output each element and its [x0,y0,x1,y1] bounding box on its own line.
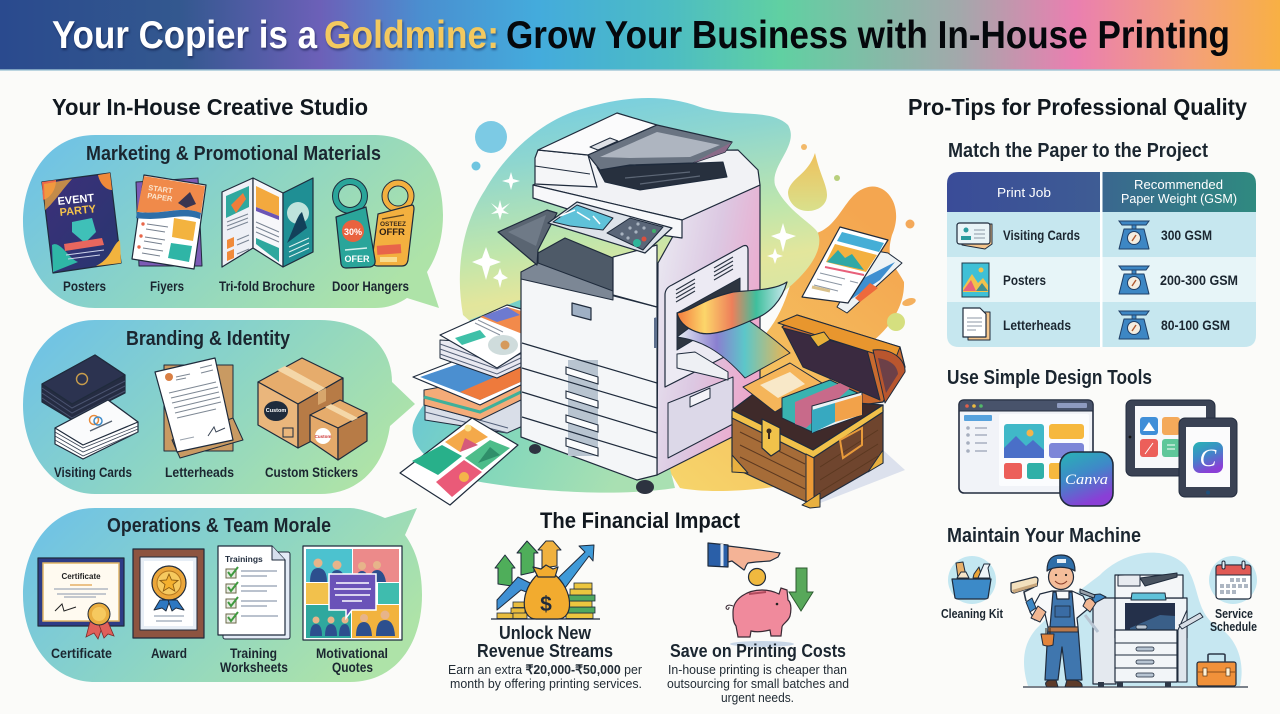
title: Your Copier is a [52,14,317,57]
icon: toolbox [1197,654,1236,686]
heading: Operations & Team Morale [107,515,331,537]
labels: Custom Stickers [265,465,358,480]
copier front body [521,272,657,494]
subheading: match the paper: Match the Paper to the Project [948,140,1208,162]
icon: money bag and rising arrows: $ [540,593,552,616]
row: letterheads: Letterheads [1003,318,1071,333]
heading: The Financial Impact [540,508,740,533]
block: unlock new revenue streams: Revenue Streams [477,641,613,661]
subheading: simple design tools: Use Simple Design Tools [947,367,1152,389]
row: letterheads [963,308,1230,340]
treasure chest [732,315,905,508]
block: save on printing costs: In-house printing is cheaper than [668,662,847,677]
icon: flyers: START [148,183,174,195]
icon: custom sticker boxes: Custom [315,434,331,439]
table: paper weights [947,172,1256,347]
icon: flyers: PAPER [147,191,174,204]
heading: Marketing & Promotional Materials [86,143,381,165]
row: posters: Posters [1003,273,1046,288]
icon: event poster [42,173,121,273]
block: save on printing costs: outsourcing for small batches and [667,676,849,691]
title [52,14,1230,57]
icon: design app window [959,400,1093,493]
row: visiting cards: Visiting Cards [1003,228,1080,243]
subheading: maintain your machine: Maintain Your Machine [947,525,1141,547]
row: posters: 200-300 GSM [1160,273,1238,288]
header row: Recommended [1134,178,1223,192]
panel: branding and identity [23,320,415,494]
block: unlock new revenue streams [448,623,643,691]
right section heading: Pro-Tips for Professional Quality [908,94,1247,120]
block: unlock new revenue streams: Earn an extra ₹20,000-₹50,000 per [448,662,643,677]
icon: training worksheets: Trainings [225,554,263,564]
icon: certificate [38,558,124,639]
labels: Door Hangers [332,279,409,294]
label: Service [1215,606,1253,621]
icon: door hangers: OFER [344,254,370,264]
row: visiting cards: 300 GSM [1161,228,1212,243]
central illustration: copier and treasure chest [400,98,917,508]
title: Goldmine: [324,14,499,57]
icon: piggy bank with coin [708,543,813,647]
icon: event poster: EVENT [57,192,95,208]
icon: custom sticker boxes [258,358,367,460]
floor sheet [400,418,518,505]
icon: door hangers: OFFR [379,227,405,238]
header row: Print Job [997,185,1051,200]
icon: motivational quotes collage [303,546,402,640]
labels: Training [230,646,277,661]
labels: Motivational [316,646,388,661]
icon: tri-fold brochure [222,178,313,267]
label: Cleaning Kit [941,606,1004,621]
section: the financial impact [448,508,849,705]
flying printed sheets [802,227,902,313]
copier scanner and document feeder [533,113,760,238]
labels [51,646,388,675]
icon: award frame [133,549,204,638]
icon: flyers [132,175,206,269]
icon: door hangers [336,182,414,268]
labels: Tri-fold Brochure [219,279,315,294]
icon: cleaning kit [941,556,1004,621]
icon: canva on tablet [1179,418,1237,497]
icon: worker servicing copier [1011,553,1248,687]
shadow [810,450,905,507]
left section heading: Your In-House Creative Studio [52,94,368,120]
icon: service schedule calendar [1209,556,1257,634]
worker [1011,555,1106,687]
labels [54,465,358,480]
labels: Posters [63,279,106,294]
heading: Branding & Identity [126,328,291,350]
labels: Fiyers [150,279,184,294]
labels: Letterheads [165,465,234,480]
icon: custom sticker boxes: Custom [266,408,286,414]
block: save on printing costs: Save on Printing Costs [670,641,846,661]
small copier [1085,573,1203,687]
label [1210,606,1257,634]
copier output bay [498,210,657,307]
block: save on printing costs: urgent needs. [721,690,794,705]
icon: canva badge [1060,452,1113,506]
icon: money bag and rising arrows [491,541,600,619]
row: visiting cards [957,221,1212,249]
labels: Visiting Cards [54,465,132,480]
block: unlock new revenue streams: month by offering printing services. [450,676,642,691]
background colour blobs [412,98,917,493]
label: Schedule [1210,619,1257,634]
icon: event poster: PARTY [59,203,97,219]
block: save on printing costs [667,641,849,705]
header banner [0,0,1280,71]
block: unlock new revenue streams: Unlock New [499,623,592,643]
copier side [657,185,760,475]
icon: door hangers: OSTEEZ [380,221,406,228]
icon: training worksheets [218,546,290,639]
row: letterheads: 80-100 GSM [1161,318,1230,333]
control panel [548,202,672,253]
panel: operations and team morale [23,508,422,682]
icon: tablet [1126,400,1215,476]
output paper [665,246,790,387]
icon: visiting cards [42,355,138,459]
icon: canva badge: Canva [1065,472,1108,488]
labels: Quotes [332,660,373,675]
header row: Paper Weight (GSM) [1121,192,1237,206]
labels: Worksheets [220,660,288,675]
labels: Certificate [51,646,112,661]
labels: Award [151,646,187,661]
paper stack [413,305,525,433]
icon: certificate: Certificate [61,572,101,581]
header row [997,178,1237,206]
icon: letterheads [155,358,243,458]
row: posters [962,263,1238,297]
labels [63,279,409,294]
panel: marketing and promotional materials [23,135,443,308]
icon: canva on tablet: C [1200,445,1217,472]
icon: door hangers: 30% [344,227,362,237]
